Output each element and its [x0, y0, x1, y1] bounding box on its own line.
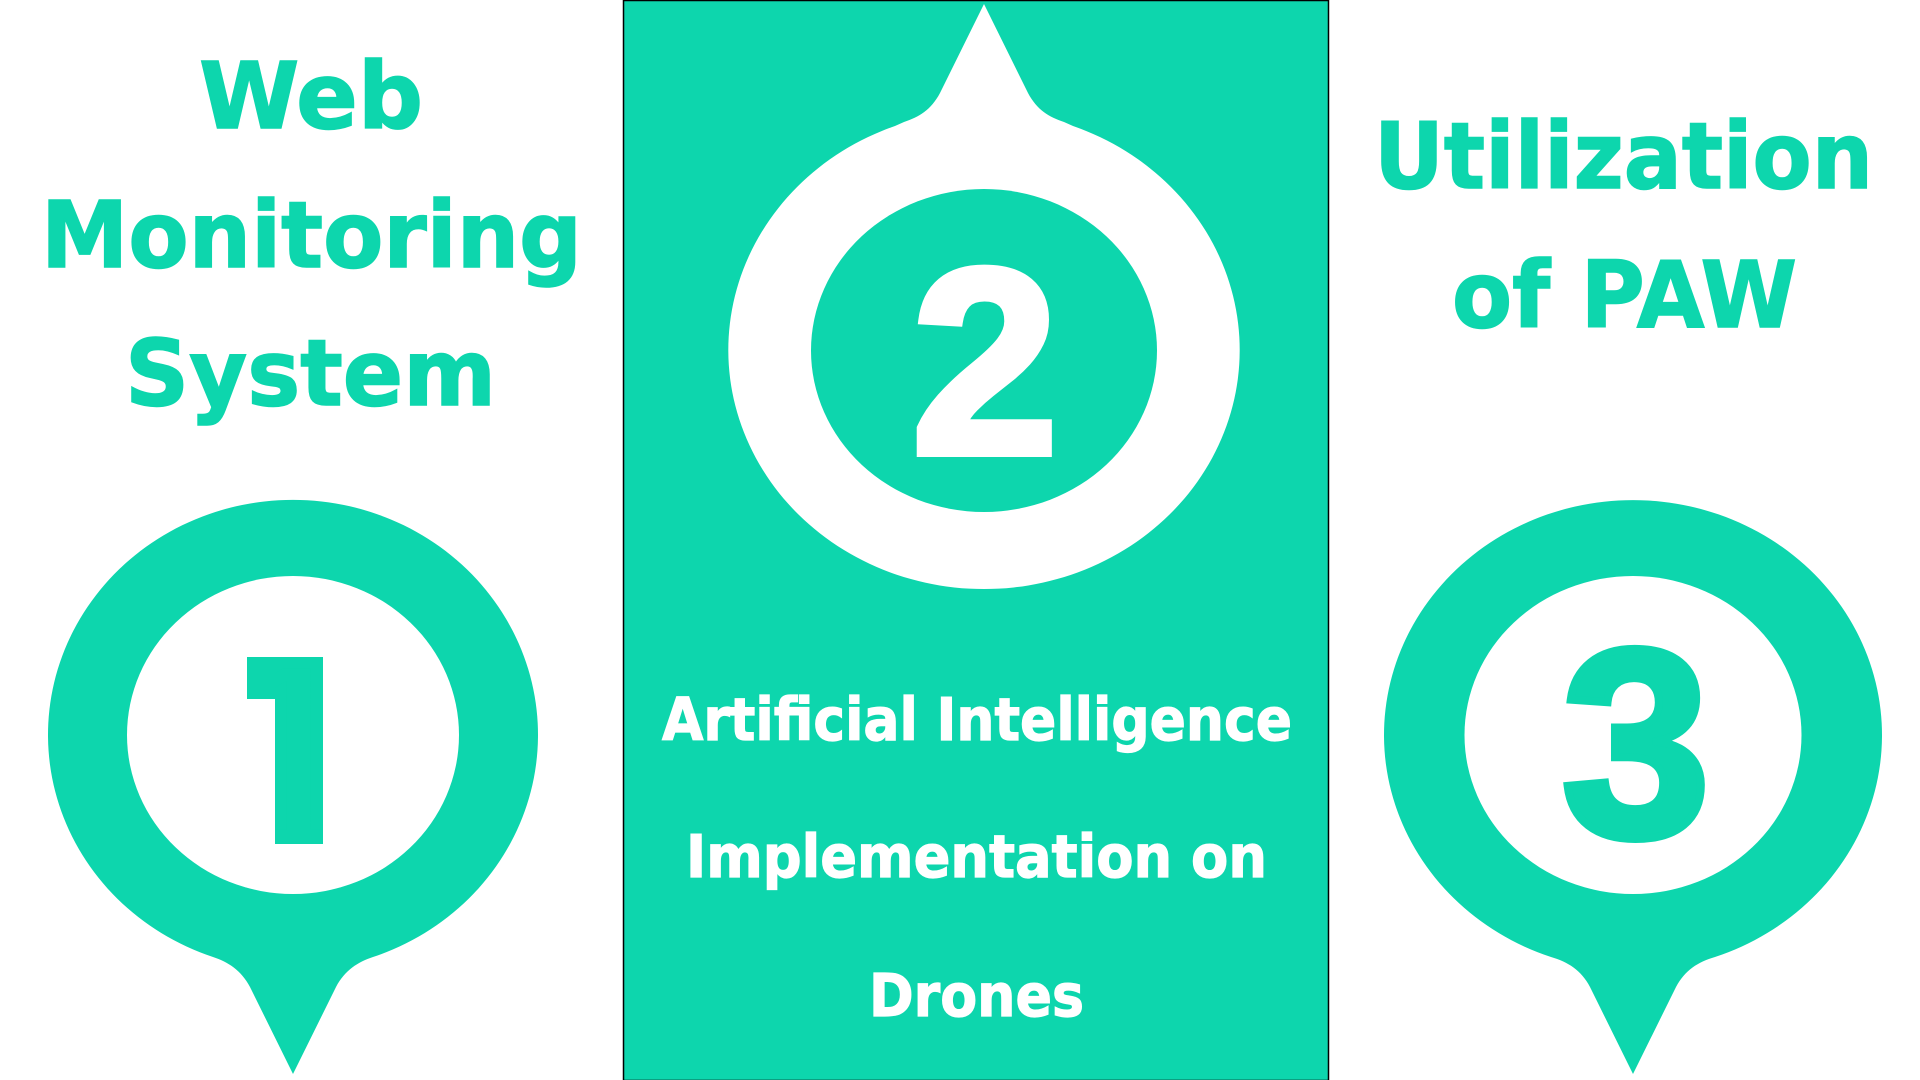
icon: map-pin marker with number 1: [48, 500, 538, 1074]
panel: left column, web monitoring system: [41, 43, 582, 1074]
heading: Utilization of PAW: of PAW: [1452, 242, 1797, 349]
icon: inverted white marker with number 2: [728, 4, 1240, 589]
icon: map-pin marker with number 1: 1: [215, 602, 368, 910]
heading: Artificial Intelligence Implementation on Drones: [662, 685, 1292, 1030]
heading: Utilization of PAW: [1374, 103, 1873, 349]
panel: right column, utilization of PAW: [1374, 103, 1882, 1074]
panel: centre column, AI on drones: [624, 0, 1328, 1080]
heading: Web Monitoring System: System: [125, 320, 496, 427]
heading: Artificial Intelligence Implementation on Drones: Implementation on: [686, 822, 1267, 891]
heading: Artificial Intelligence Implementation on Drones: Artificial Intelligence: [662, 685, 1292, 754]
heading: Web Monitoring System: Monitoring: [41, 182, 582, 289]
heading: Utilization of PAW: Utilization: [1374, 103, 1873, 210]
heading: Web Monitoring System: Web: [199, 43, 423, 150]
heading: Web Monitoring System: [41, 43, 582, 427]
icon: map-pin marker with number 3: 3: [1561, 593, 1711, 893]
icon: inverted white marker with number 2: 2: [912, 214, 1058, 509]
icon: map-pin marker with number 3: [1384, 500, 1882, 1074]
heading: Artificial Intelligence Implementation on Drones: Drones: [869, 961, 1084, 1030]
